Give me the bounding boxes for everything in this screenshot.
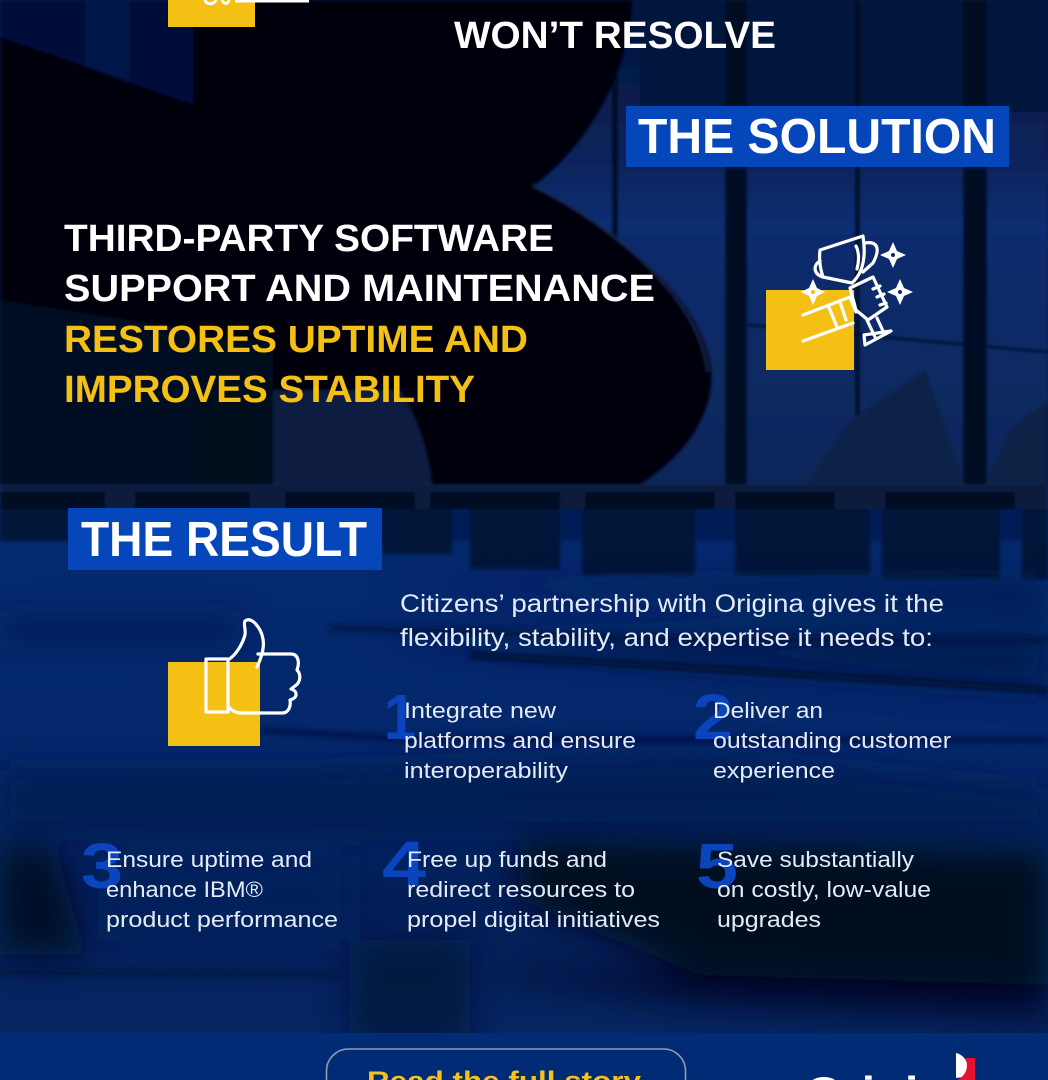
- intro text: flexibility, stability, and expertise it needs to:: [400, 624, 933, 652]
- item 5: [696, 830, 931, 932]
- item 2: outstanding customer: [713, 728, 952, 753]
- heading: won't resolve: WON’T RESOLVE: [454, 15, 776, 57]
- background: building photo: [0, 0, 1048, 490]
- solution text: RESTORES UPTIME AND: [64, 319, 528, 361]
- solution text: IMPROVES STABILITY: [64, 369, 475, 411]
- solution text: THIRD-PARTY SOFTWARE: [64, 218, 554, 260]
- item 4: [382, 828, 660, 932]
- item 4: propel digital initiatives: [407, 907, 660, 932]
- item 1: [384, 681, 636, 783]
- item 3: 3: [81, 830, 123, 902]
- item 4: 4: [382, 828, 427, 900]
- logo: Origina: [805, 1053, 976, 1080]
- item 5: on costly, low-value: [717, 877, 931, 902]
- item 4: redirect resources to: [407, 877, 635, 902]
- item 1: platforms and ensure: [404, 728, 636, 753]
- item 2: [693, 681, 952, 783]
- icon: thumbs up: [168, 620, 300, 746]
- item 3: product performance: [106, 907, 338, 932]
- item 1: 1: [384, 681, 416, 753]
- heading: the result: THE RESULT: [81, 513, 367, 567]
- heading: the solution: THE SOLUTION: [638, 110, 996, 164]
- icon: trophy: [766, 236, 913, 370]
- item 1: interoperability: [404, 758, 569, 783]
- intro text: [400, 590, 944, 652]
- footer band: [0, 1033, 1048, 1080]
- item 3: enhance IBM®: [106, 877, 263, 902]
- item 5: upgrades: [717, 907, 821, 932]
- button: read the full story: [326, 1049, 686, 1080]
- solution text: SUPPORT AND MAINTENANCE: [64, 268, 655, 310]
- item 5: 5: [696, 830, 738, 902]
- icon: previous section yellow square: [168, 0, 309, 27]
- item 1: Integrate new: [404, 698, 557, 723]
- item 2: 2: [693, 681, 733, 753]
- item 2: Deliver an: [713, 698, 823, 723]
- item 3: Ensure uptime and: [106, 847, 312, 872]
- background: blurred lower photo: [0, 483, 1048, 1050]
- solution text: [64, 218, 655, 411]
- intro text: Citizens’ partnership with Origina gives it the: [400, 590, 944, 618]
- item 4: Free up funds and: [407, 847, 607, 872]
- item 3: [81, 830, 338, 932]
- item 2: experience: [713, 758, 835, 783]
- item 5: Save substantially: [717, 847, 915, 872]
